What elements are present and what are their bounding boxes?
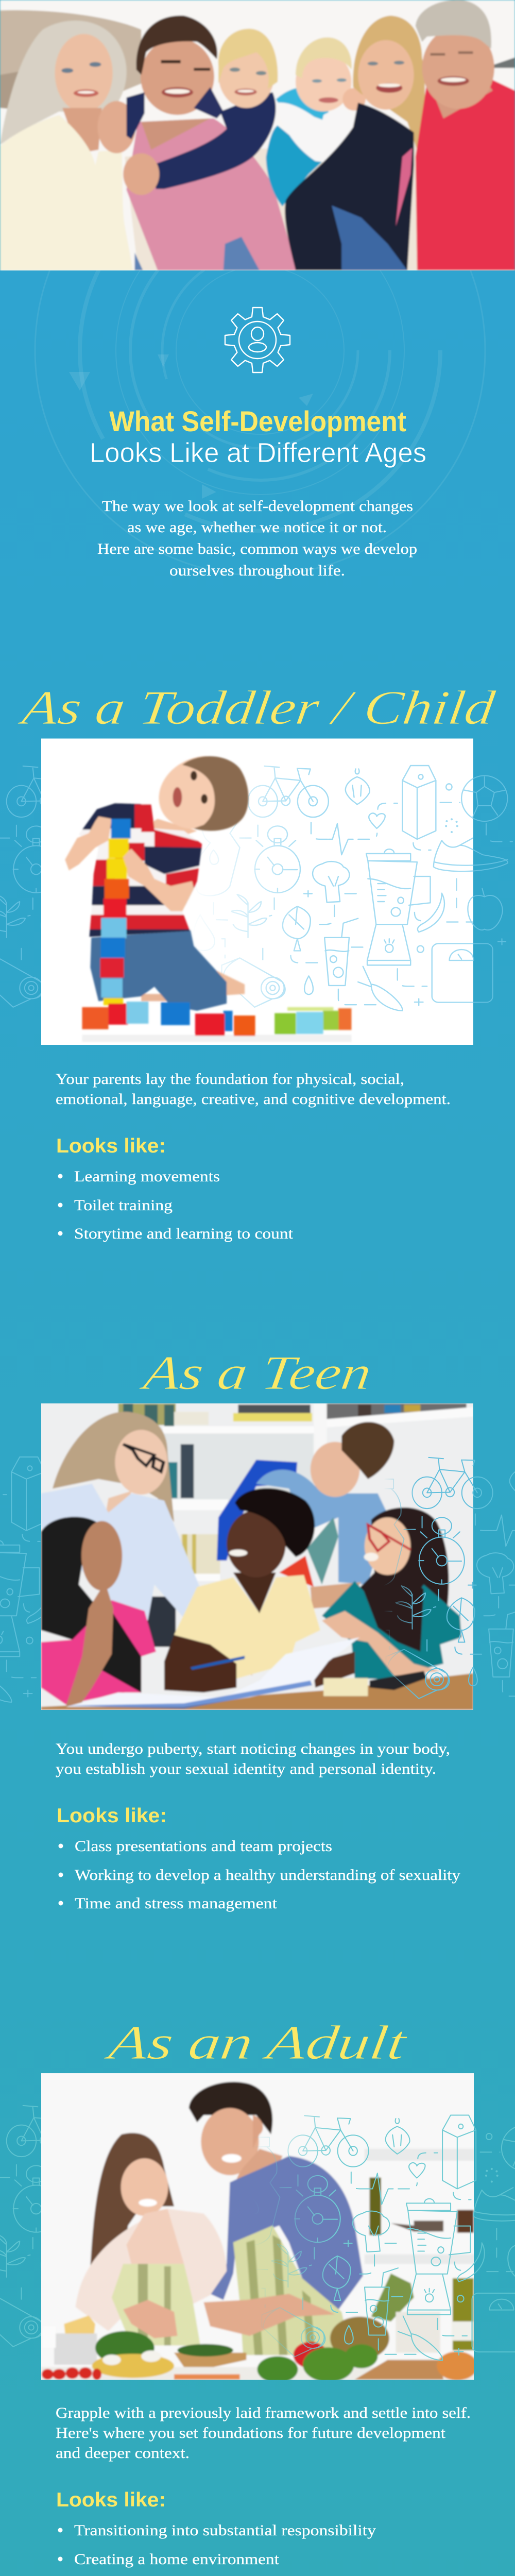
heading: As a Teen: As a Teen [137, 1346, 375, 1400]
intro background: concentric swirl rings with arrows [34, 270, 486, 576]
icon: gear with person [225, 308, 290, 372]
photo: couple cooking [41, 2073, 474, 2380]
photo: teens studying with teacher [40, 1402, 515, 1711]
bullet list: adult [58, 2522, 376, 2576]
section 1 text: emotional, language, creative, and cognitive development. [56, 1091, 451, 1108]
intro text: ourselves throughout life. [169, 562, 345, 579]
bullet list: teen [59, 1838, 460, 1912]
bullet list: teen: Working to develop a healthy understanding of sexuality [75, 1867, 460, 1884]
bullet list: toddler: Learning movements [74, 1168, 220, 1185]
photo: toddler stacking blocks [41, 738, 512, 1045]
title: What Self-Development [109, 405, 406, 437]
section 1 text: Your parents lay the foundation for physical, social, [56, 1071, 404, 1088]
section 1 text [56, 1071, 451, 1242]
section 2 text: You undergo puberty, start noticing changes in your body, [56, 1740, 450, 1757]
intro text [97, 498, 417, 579]
bullet list: toddler [58, 1168, 294, 1242]
title [90, 405, 426, 468]
hero photo: three-generation family on beach [0, 0, 515, 272]
heading: As an Adult: As an Adult [101, 2016, 411, 2070]
intro text: as we age, whether we notice it or not. [127, 519, 387, 536]
heading: As a Toddler / Child: As a Toddler / Child [15, 681, 499, 735]
bullet list: adult: Transitioning into substantial responsibility [74, 2522, 376, 2539]
bullet list: teen: Class presentations and team projects [75, 1838, 332, 1855]
intro text: The way we look at self-development changes [102, 498, 413, 515]
bullet list: toddler: Toilet training [74, 1197, 173, 1214]
section 3 text: Here's where you set foundations for future development [56, 2425, 446, 2442]
section 1 text: Looks like: [56, 1135, 166, 1157]
section 2 text: Looks like: [57, 1805, 167, 1827]
section 3 text: and deeper context. [56, 2445, 190, 2462]
section 2 text [56, 1740, 460, 1912]
section 1 doodle pattern in margins [0, 766, 512, 1011]
bullet list: toddler: Storytime and learning to count [74, 1225, 294, 1242]
bullet list: adult: Creating a home environment [74, 2551, 280, 2568]
title: Looks Like at Different Ages [90, 437, 426, 468]
section 2 text: you establish your sexual identity and personal identity. [56, 1760, 436, 1777]
section 3 text [56, 2404, 471, 2576]
bullet list: teen: Time and stress management [75, 1895, 278, 1912]
section 3 doodle pattern in margins [0, 2105, 515, 2360]
section 3 text: Grapple with a previously laid framework and settle into self. [56, 2404, 471, 2421]
section 3 text: Looks like: [56, 2489, 166, 2511]
section 2 doodle pattern in margins [0, 1457, 515, 1702]
intro text: Here are some basic, common ways we develop [97, 540, 417, 557]
